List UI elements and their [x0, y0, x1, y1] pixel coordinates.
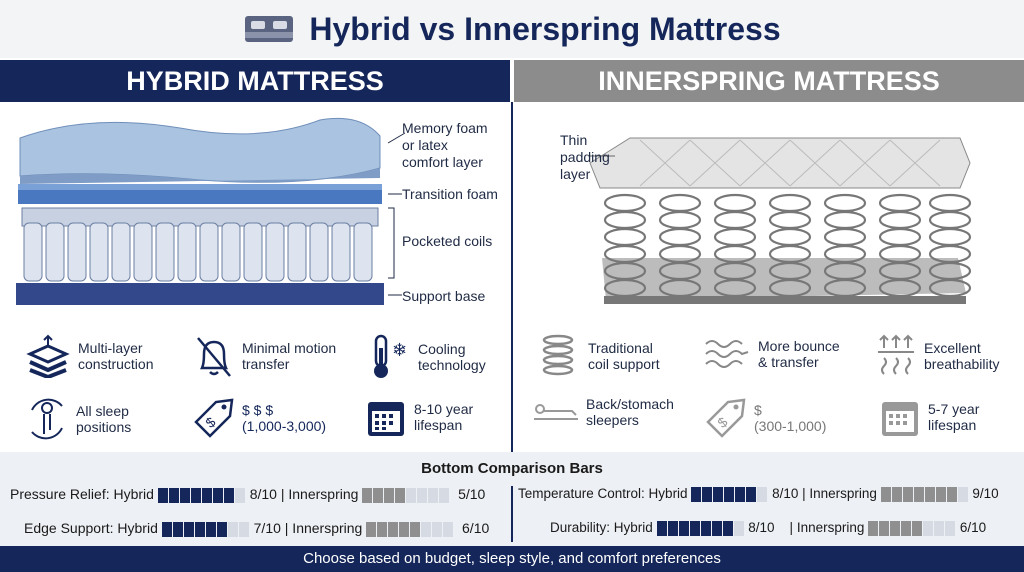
footer: Choose based on budget, sleep style, and comfort preferences — [303, 550, 721, 567]
header: hybrid — [0, 60, 510, 102]
feature: motion: Minimal motion — [242, 340, 336, 356]
feature: bounce — [705, 338, 840, 370]
feature: lifespan: 5-7 year — [928, 401, 979, 417]
feature: cooling: ❄ — [392, 340, 407, 360]
feature: multi-layer: construction — [78, 356, 153, 372]
feature: lifespan — [368, 401, 473, 436]
feature: cooling: Cooling — [418, 341, 465, 357]
bar: pressure relief: Pressure Relief: Hybrid 8/10 | Innerspring 5/10 — [10, 486, 485, 502]
feature: price: $ $ $ — [242, 402, 273, 418]
hybrid layer labels: Memory foam — [402, 120, 488, 136]
title: Hybrid vs Innerspring Mattress — [309, 10, 781, 46]
text: Transition foam — [402, 186, 498, 202]
feature: price: $ — [714, 414, 731, 431]
feature: breathability — [878, 334, 1000, 375]
hybrid features — [26, 334, 486, 440]
text: Support base — [402, 288, 485, 304]
feature: sleep positions — [31, 398, 131, 440]
feature: breathability: Excellent — [924, 340, 981, 356]
title — [0, 0, 1024, 58]
header: innerspring — [514, 60, 1024, 102]
header: innerspring: INNERSPRING MATTRESS — [598, 66, 940, 96]
hybrid layer labels: comfort layer — [402, 154, 483, 170]
header: hybrid: HYBRID MATTRESS — [126, 66, 384, 96]
hybrid mattress diagram — [16, 118, 406, 305]
feature: coil support: Traditional — [588, 340, 653, 356]
feature: price: (1,000-3,000) — [242, 418, 326, 434]
feature: lifespan: lifespan — [928, 417, 976, 433]
comparison section — [0, 452, 1024, 546]
bar: edge support: Edge Support: Hybrid 7/10 | Innerspring 6/10 — [24, 520, 489, 536]
feature: price: $ — [754, 402, 762, 418]
feature: lifespan: 8-10 year — [414, 401, 473, 417]
feature: coil support — [542, 334, 660, 376]
innerspring label: padding — [560, 149, 610, 165]
innerspring mattress diagram — [589, 138, 972, 304]
feature: motion: transfer — [242, 356, 289, 372]
innerspring label: layer — [560, 166, 590, 182]
feature: bounce: & transfer — [758, 354, 819, 370]
feature: cooling — [374, 334, 486, 378]
feature: multi-layer: Multi-layer — [78, 340, 143, 356]
footer — [0, 546, 1024, 572]
bar: temperature control: Temperature Control: Hybrid 8/10 | Innerspring 9/10 — [518, 486, 999, 501]
feature: motion — [197, 337, 336, 377]
innerspring label — [560, 132, 610, 182]
feature: price — [194, 398, 326, 438]
feature: back/stomach: sleepers — [586, 412, 639, 428]
feature: cooling: technology — [418, 357, 486, 373]
feature: price — [706, 398, 826, 438]
feature: price: $ — [202, 414, 219, 431]
bar: durability: Durability: Hybrid 8/10 | Innerspring 6/10 — [550, 520, 986, 535]
innerspring features — [534, 334, 1000, 438]
feature: back/stomach — [534, 396, 674, 428]
feature: sleep positions: All sleep — [76, 403, 129, 419]
hybrid layer labels — [402, 120, 488, 170]
feature: breathability: breathability — [924, 356, 1000, 372]
feature: lifespan — [882, 401, 980, 436]
feature: multi-layer — [26, 334, 153, 378]
feature: bounce: More bounce — [758, 338, 840, 354]
text: Pocketed coils — [402, 233, 492, 249]
hybrid layer labels: or latex — [402, 137, 448, 153]
feature: back/stomach: Back/stomach — [586, 396, 674, 412]
innerspring label: Thin — [560, 132, 587, 148]
feature: sleep positions: positions — [76, 419, 131, 435]
feature: price: (300-1,000) — [754, 418, 826, 434]
comparison heading: Bottom Comparison Bars — [421, 460, 603, 477]
feature: lifespan: lifespan — [414, 417, 462, 433]
feature: coil support: coil support — [588, 356, 660, 372]
icon: bed — [245, 16, 293, 42]
